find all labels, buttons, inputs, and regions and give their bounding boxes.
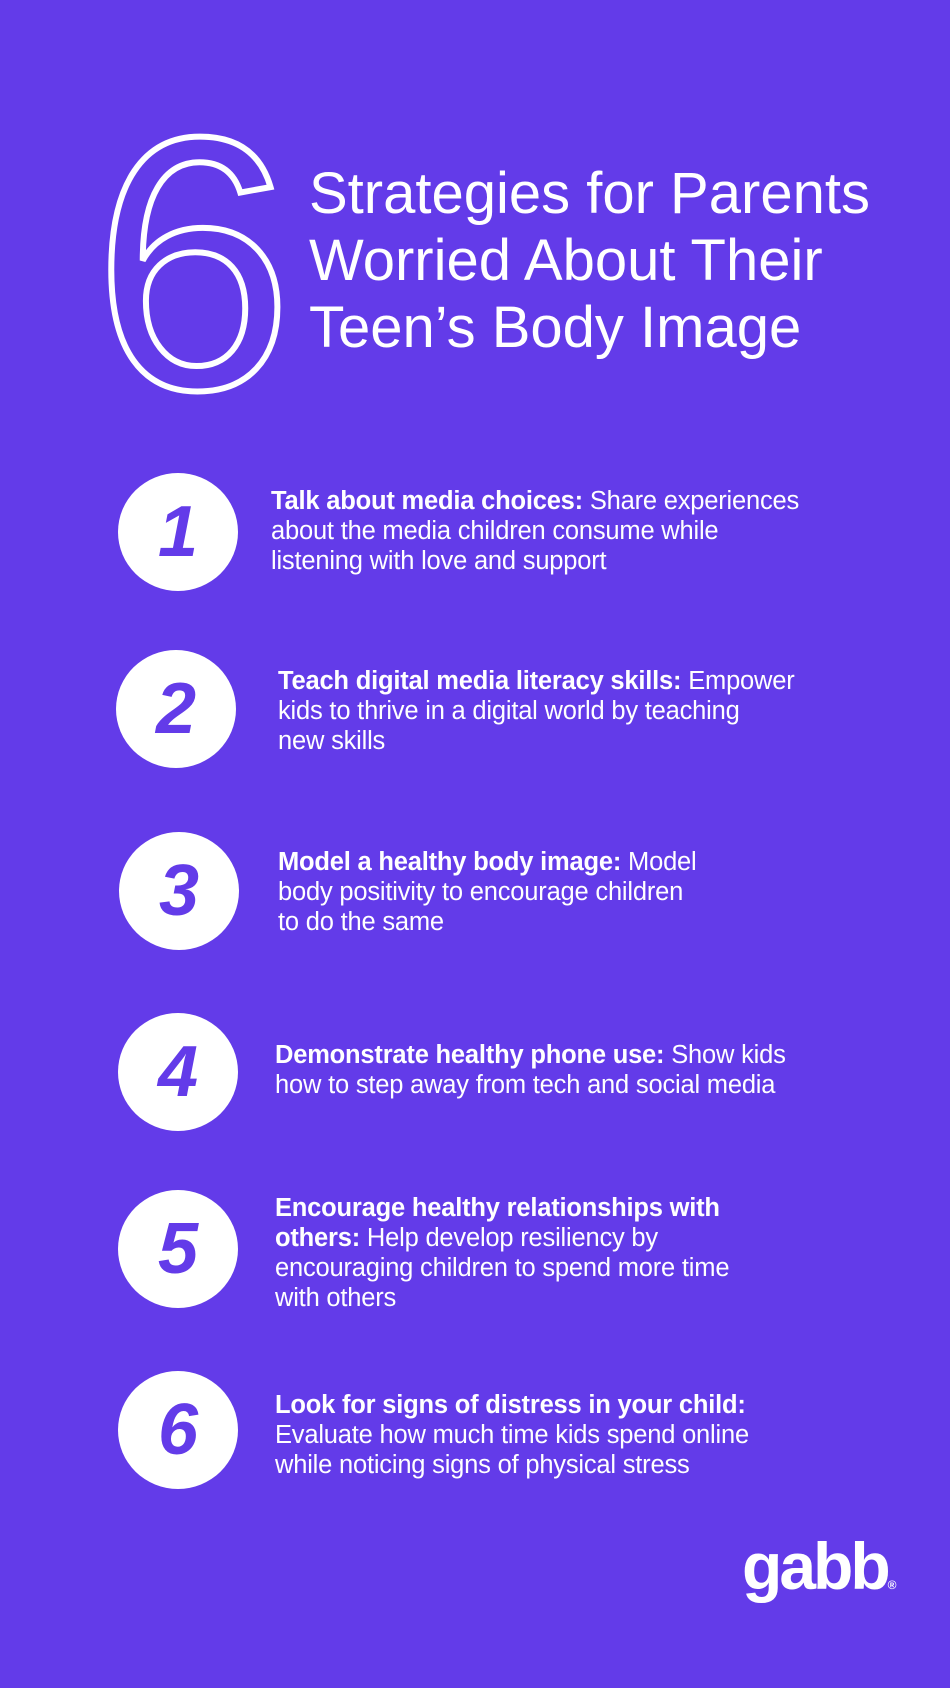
title: Worried About Their	[309, 228, 823, 293]
number circle 4: 4	[158, 1032, 198, 1112]
text 5: Encourage healthy relationships with	[275, 1194, 720, 1222]
number circle 4	[118, 1013, 238, 1131]
number circle 3: 3	[159, 851, 199, 931]
number circle 1: 1	[158, 492, 198, 572]
text 6: Evaluate how much time kids spend online	[275, 1421, 749, 1449]
text 6	[275, 1391, 749, 1479]
text 4: Demonstrate healthy phone use: Show kids	[275, 1041, 786, 1069]
title: Teen’s Body Image	[309, 295, 801, 360]
text 1: listening with love and support	[271, 547, 606, 575]
text 3: to do the same	[278, 908, 444, 936]
text 3: Model a healthy body image: Model	[278, 848, 697, 876]
text 1	[271, 487, 799, 575]
text 1: Talk about media choices: Share experiences	[271, 487, 799, 515]
text 5: others: Help develop resiliency by	[275, 1224, 658, 1252]
text 6: Look for signs of distress in your child:	[275, 1391, 746, 1419]
number circle 3	[119, 832, 239, 950]
text 2: Teach digital media literacy skills: Empower	[278, 667, 795, 695]
text 5	[275, 1194, 729, 1312]
text 3: body positivity to encourage children	[278, 878, 683, 906]
item 4	[118, 1013, 786, 1131]
text 5: with others	[275, 1284, 396, 1312]
number circle 5	[118, 1190, 238, 1308]
number circle 5: 5	[158, 1209, 198, 1289]
text 2: new skills	[278, 727, 385, 755]
text 1: about the media children consume while	[271, 517, 718, 545]
text 6: while noticing signs of physical stress	[275, 1451, 690, 1479]
text 2: kids to thrive in a digital world by teaching	[278, 697, 740, 725]
text 2	[278, 667, 795, 755]
item 3	[119, 832, 697, 950]
number circle 2: 2	[156, 669, 196, 749]
text 4: how to step away from tech and social media	[275, 1071, 775, 1099]
item 6	[118, 1371, 749, 1489]
number circle 6	[118, 1371, 238, 1489]
title: Strategies for Parents	[309, 161, 870, 226]
item 5	[118, 1190, 729, 1312]
number circle 1	[118, 473, 238, 591]
number circle 2	[116, 650, 236, 768]
text 5: encouraging children to spend more time	[275, 1254, 729, 1282]
text 3	[278, 848, 697, 936]
number circle 6: 6	[158, 1390, 198, 1470]
text 4	[275, 1041, 786, 1099]
item 1	[118, 473, 799, 591]
title	[309, 161, 870, 360]
logo: gabb: gabb®	[742, 1529, 896, 1603]
item 2	[116, 650, 795, 768]
